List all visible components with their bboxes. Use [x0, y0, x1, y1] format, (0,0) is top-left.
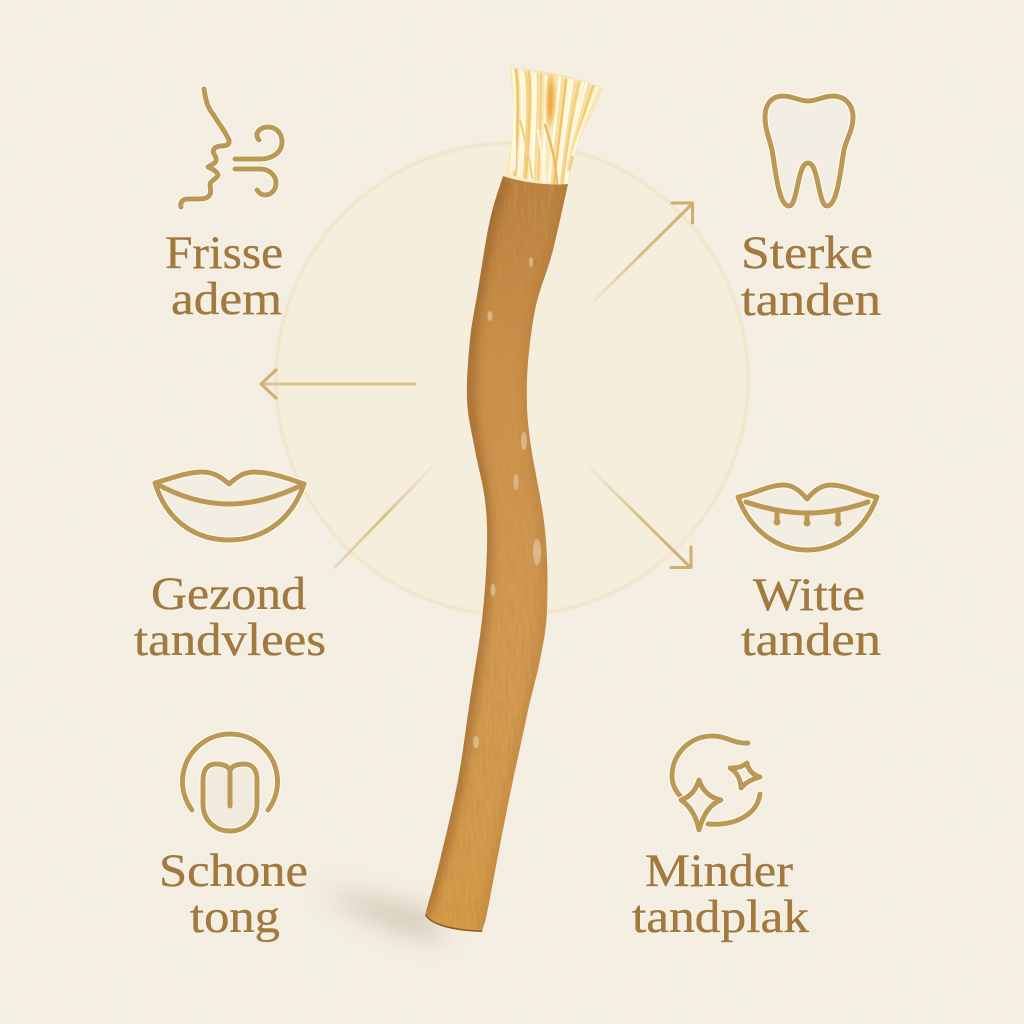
- stick body: [425, 176, 568, 932]
- icon: face breathing: [181, 89, 282, 207]
- icon: sparkles and circle: [672, 736, 760, 830]
- benefit: Witte tanden: [738, 485, 881, 666]
- miswak stick: [425, 67, 603, 932]
- brush bristles: [504, 67, 603, 190]
- label: Schone: [159, 845, 308, 897]
- arrow: to Sterke tanden: [590, 203, 692, 305]
- label: Witte: [753, 569, 865, 621]
- icon: tongue: [183, 734, 278, 831]
- icon: lips with teeth: [738, 485, 877, 550]
- arrow: to Gezond tandvlees: [335, 467, 432, 567]
- label line 2: tanden: [741, 274, 881, 326]
- label line 2: tanden: [741, 614, 881, 666]
- arrow: to Witte tanden: [590, 468, 691, 568]
- central circle: [276, 143, 748, 615]
- label line 2: adem: [171, 273, 282, 325]
- label line 2: tandvlees: [134, 614, 326, 666]
- label: Sterke: [741, 227, 873, 279]
- stick shadow: [320, 890, 448, 938]
- label: Gezond: [151, 568, 306, 620]
- benefit: Gezond tandvlees: [134, 472, 326, 666]
- benefit: Frisse adem: [165, 89, 283, 325]
- icon: lips: [155, 472, 304, 540]
- arrow: to Frisse adem: [261, 370, 415, 398]
- stick spots: [473, 257, 541, 748]
- label line 2: tandplak: [632, 891, 810, 943]
- benefit: Schone tong: [159, 734, 308, 943]
- benefit: Minder tandplak: [632, 736, 810, 943]
- label: Frisse: [165, 227, 283, 279]
- label: Minder: [645, 845, 793, 897]
- icon: tooth: [765, 96, 853, 206]
- benefit: Sterke tanden: [741, 96, 881, 326]
- label line 2: tong: [190, 891, 280, 943]
